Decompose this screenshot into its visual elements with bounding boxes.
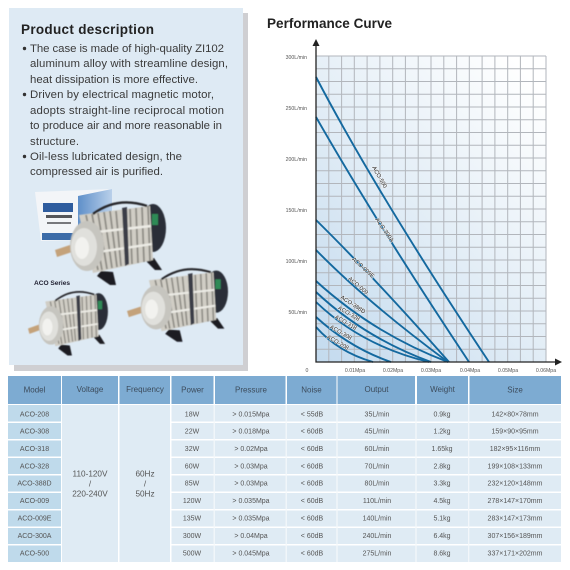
curve labels: ACO-500 [370,166,388,189]
table text: > 0.03Mpa [234,464,268,470]
table text: ACO-328 [20,464,49,470]
table text: < 60dB [301,446,324,453]
table text: < 55dB [301,412,324,418]
table text: 337×171×202mm [488,550,543,558]
y axis labels: 250L/min [286,106,307,112]
table text: 6.4kg [433,533,451,540]
x axis labels: 0.04Mpa [460,368,480,374]
table text: > 0.018Mpa [232,428,270,436]
table header: Output [364,385,389,394]
table text: 85W [185,480,200,488]
table text: ACO-308 [20,428,49,436]
table header: Size [507,386,523,394]
table text: 60W [185,464,200,470]
table header: Power [181,386,204,394]
table text: ACO-009 [20,498,49,505]
table text: 1.2kg [433,428,451,436]
table text: 45L/min [365,428,390,436]
table text: 300W [183,533,202,540]
curve labels: ACO-388D [339,295,366,315]
table text: 60Hz [135,470,155,478]
table text: 159×90×95mm [491,428,539,436]
table text: 3.3kg [433,480,451,488]
text block: feature bullets: adopts straight-line reciprocal motion [30,105,224,117]
icon: large air pump [55,202,166,285]
table text [17,412,543,558]
table text: ACO-388D [17,480,52,488]
table text: ACO-500 [20,550,49,558]
table text: 110L/min [363,498,391,505]
x axis labels: 0.03Mpa [421,368,441,374]
text block: feature bullets: compressed air is purified. [30,166,163,178]
table text: 240L/min [363,533,392,540]
table: specifications [8,376,561,562]
table text: 2.8kg [433,464,451,470]
table text: < 60dB [301,550,324,558]
heading: product description: Product description [21,22,154,37]
text block: feature bullets: Oil-less lubricated design, the [30,151,182,163]
table text: 5.1kg [433,516,451,522]
table header: Model [24,386,46,394]
y axis labels: 100L/min [286,259,307,265]
curve labels: ACO-318 [334,314,357,332]
table header: Frequency [126,385,164,394]
table body cells [8,405,561,562]
text block: feature bullets: structure. [30,136,79,148]
table header [8,376,561,404]
text block: feature bullets [23,43,228,178]
table text: > 0.035Mpa [232,516,270,522]
y axis labels: 150L/min [286,208,307,214]
curve labels: ACO-009E [350,257,375,280]
table text: < 60dB [301,533,324,540]
text block: feature bullets: to produce air and more reasonable in [30,120,222,132]
table text: 32W [185,446,200,453]
table text: 22W [185,428,200,436]
table text: < 60dB [301,480,324,488]
table text: < 60dB [301,516,324,522]
curve labels [326,166,394,352]
table text: ACO-009E [18,516,52,522]
table text: 110-120V [73,470,108,478]
table header: Pressure [235,386,268,394]
curve labels: ACO-308 [329,324,352,342]
table text: 232×120×148mm [488,480,543,488]
table text: 199×108×133mm [488,464,543,470]
table text: > 0.015Mpa [232,412,270,418]
x axis labels [306,368,556,374]
table text: 18W [185,412,200,418]
y axis labels [286,55,307,316]
table text: 500W [183,550,202,558]
text block: feature bullets: Driven by electrical magnetic motor, [30,89,214,101]
heading: performance curve: Performance Curve [267,16,392,31]
line chart: performance curve [286,39,562,374]
table text: < 60dB [301,464,324,470]
table text: 0.9kg [433,412,451,418]
table text: ACO-300A [18,533,52,540]
table header: Noise [301,386,322,394]
table text: 1.65kg [431,446,453,453]
y axis labels: 300L/min [286,55,307,61]
table text: 8.6kg [433,550,451,558]
table text: 60L/min [365,446,390,453]
curve labels: ACO-009 [346,276,369,296]
table text: > 0.035Mpa [232,498,270,505]
icon: product box [35,189,112,241]
y axis labels: 50L/min [289,310,307,316]
table text: < 60dB [301,498,324,505]
x axis labels: 0.02Mpa [383,368,403,374]
table text: 220-240V [72,490,108,498]
table text: 50Hz [135,490,155,498]
text block: feature bullets: The case is made of high-quality ZI102 [30,43,224,55]
icon: medium air pump [127,269,228,342]
table text: / [144,480,147,488]
table text: / [89,480,92,488]
y axis labels: 200L/min [286,157,307,163]
table text: 182×95×116mm [490,446,540,453]
x axis labels: 0.05Mpa [498,368,518,374]
table text: 142×80×78mm [491,412,539,418]
table header: Weight [430,385,456,394]
axes [312,39,562,366]
text block: feature bullets: aluminum alloy with streamline design, [30,58,228,70]
table text: 278×147×170mm [488,498,543,505]
table text: > 0.045Mpa [232,550,270,558]
table text: 135W [183,516,202,522]
icon: small air pump [28,292,108,355]
text block: feature bullets: heat dissipation is more effective. [30,74,198,86]
table text: > 0.02Mpa [234,446,268,453]
table text: 307×156×189mm [488,533,543,540]
table text: > 0.03Mpa [234,480,268,488]
x axis labels: 0 [306,368,309,374]
table text: 4.5kg [433,498,451,505]
label: ACO Series: ACO Series [34,280,70,287]
table text: > 0.04Mpa [234,533,268,540]
table text: ACO-208 [20,412,49,418]
table text: 283×147×173mm [488,516,543,522]
curve labels: ACO-300A [373,217,394,244]
table text: 70L/min [365,464,390,470]
panel: product description [9,8,248,371]
table text: 80L/min [365,480,390,488]
curve labels: ACO-208 [326,334,349,352]
table text: < 60dB [301,428,324,436]
table text: 35L/min [365,412,390,418]
table text: ACO-318 [20,446,49,453]
curves [316,77,489,362]
table text: 140L/min [363,516,392,522]
curve labels: ACO-328 [337,305,360,323]
x axis labels: 0.06Mpa [536,368,556,374]
table text: 120W [183,498,202,505]
table header: Voltage [77,385,104,394]
table text: 275L/min [363,550,392,558]
x axis labels: 0.01Mpa [345,368,365,374]
